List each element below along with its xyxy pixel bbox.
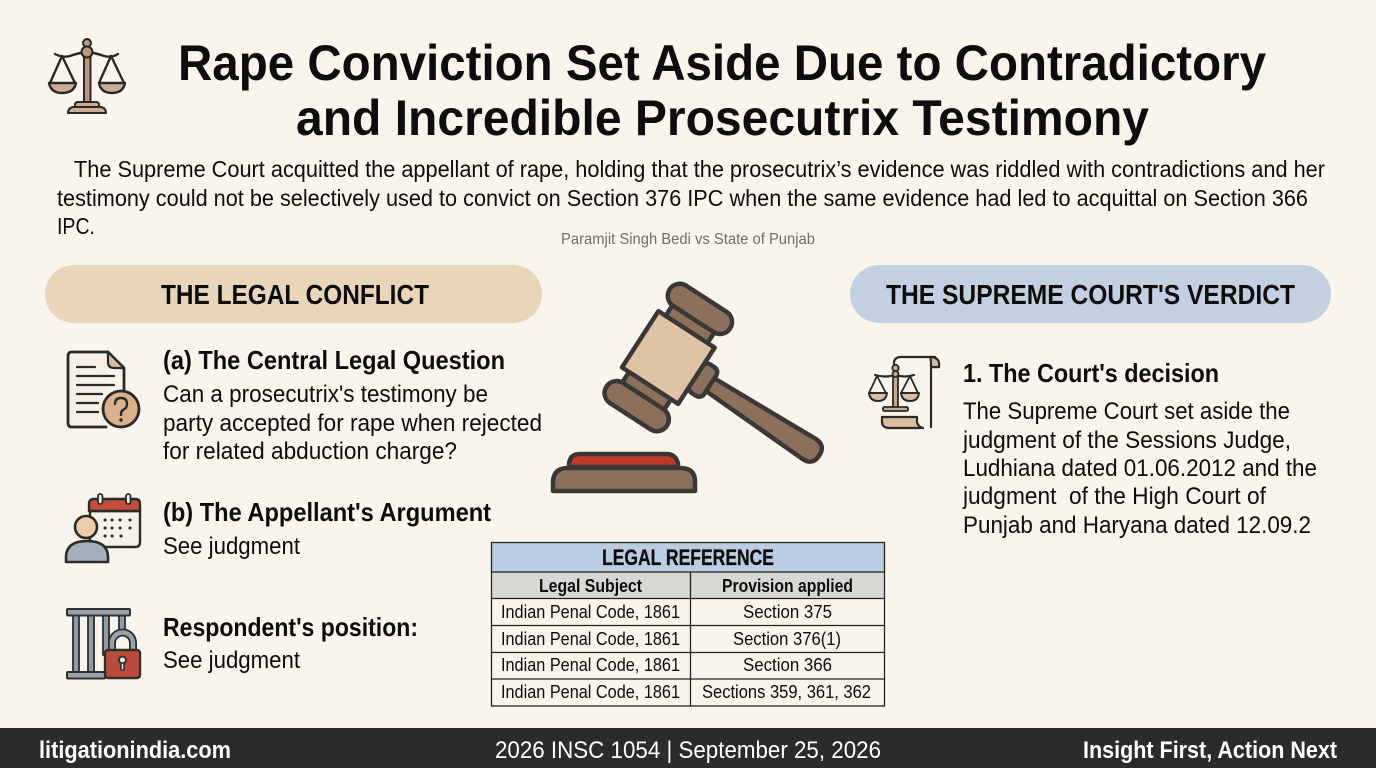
text block: central legal question: for related abduction charge? xyxy=(163,438,457,465)
text block: the court's decision: 1. The Court's decision xyxy=(963,358,1219,388)
heading pill: the legal conflict: THE LEGAL CONFLICT xyxy=(161,279,429,310)
heading pill: the supreme court's verdict xyxy=(850,265,1331,323)
heading pill: the legal conflict xyxy=(45,265,542,323)
text block: central legal question: Can a prosecutrix's testimony be xyxy=(163,381,488,408)
title: and Incredible Prosecutrix Testimony xyxy=(296,90,1149,146)
heading pill: the supreme court's verdict: THE SUPREME COURT'S VERDICT xyxy=(886,279,1295,310)
table: legal reference: Section 376(1) xyxy=(733,628,841,649)
summary paragraph: IPC. xyxy=(57,213,95,239)
text block: central legal question xyxy=(163,345,542,465)
footer bar: 2026 INSC 1054 | September 25, 2026 xyxy=(495,737,881,764)
text block: appellant's argument: (b) The Appellant's Argument xyxy=(163,497,491,527)
table: legal reference: Section 375 xyxy=(743,601,832,622)
text block: respondent's position: Respondent's position: xyxy=(163,612,418,642)
panel: the legal conflict xyxy=(45,265,542,678)
illustration: gavel and sound block xyxy=(553,279,857,514)
table: legal reference: Indian Penal Code, 1861 xyxy=(501,628,680,649)
table: legal reference: Section 366 xyxy=(743,654,832,675)
summary paragraph xyxy=(57,156,1325,239)
text block: appellant's argument: See judgment xyxy=(163,533,300,560)
table: legal reference xyxy=(491,542,885,706)
footer bar xyxy=(0,728,1376,768)
table: legal reference: Indian Penal Code, 1861 xyxy=(501,601,680,622)
table: legal reference: Provision applied xyxy=(722,575,853,596)
text block: the court's decision: Punjab and Haryana dated 12.09.2 xyxy=(963,512,1311,539)
text block: the court's decision: The Supreme Court set aside the xyxy=(963,398,1290,425)
summary paragraph: testimony could not be selectively used to convict on Section 376 IPC when the same evidence had led to acquittal on Section 366 xyxy=(57,185,1308,211)
case citation: Paramjit Singh Bedi vs State of Punjab xyxy=(561,231,815,248)
footer bar: litigationindia.com xyxy=(39,737,231,764)
text block: central legal question: party accepted for rape when rejected xyxy=(163,410,542,437)
text block: the court's decision: judgment of the Sessions Judge, xyxy=(962,427,1291,454)
icon: person with calendar xyxy=(66,494,140,562)
text block: respondent's position xyxy=(163,612,418,674)
text block: the court's decision xyxy=(962,358,1317,539)
title: Rape Conviction Set Aside Due to Contradictory xyxy=(178,35,1266,91)
text block: appellant's argument xyxy=(163,497,491,560)
table: legal reference: Legal Subject xyxy=(539,575,642,596)
title xyxy=(178,35,1266,146)
footer bar: Insight First, Action Next xyxy=(1083,737,1337,764)
panel: the supreme court's verdict xyxy=(850,265,1331,539)
text block: respondent's position: See judgment xyxy=(163,647,300,674)
table: legal reference: LEGAL REFERENCE xyxy=(602,545,774,570)
icon: document with question mark xyxy=(68,352,139,427)
table: legal reference: Indian Penal Code, 1861 xyxy=(501,654,680,675)
table: legal reference: Indian Penal Code, 1861 xyxy=(501,681,680,702)
icon: scales on scroll xyxy=(869,357,939,428)
table: legal reference: Sections 359, 361, 362 xyxy=(702,681,871,702)
text block: central legal question: (a) The Central Legal Question xyxy=(163,345,505,375)
icon: prison bars with padlock xyxy=(67,609,140,678)
text block: the court's decision: judgment of the High Court of xyxy=(962,483,1266,510)
icon: scales of justice xyxy=(49,39,125,113)
text block: the court's decision: Ludhiana dated 01.06.2012 and the xyxy=(963,455,1317,482)
